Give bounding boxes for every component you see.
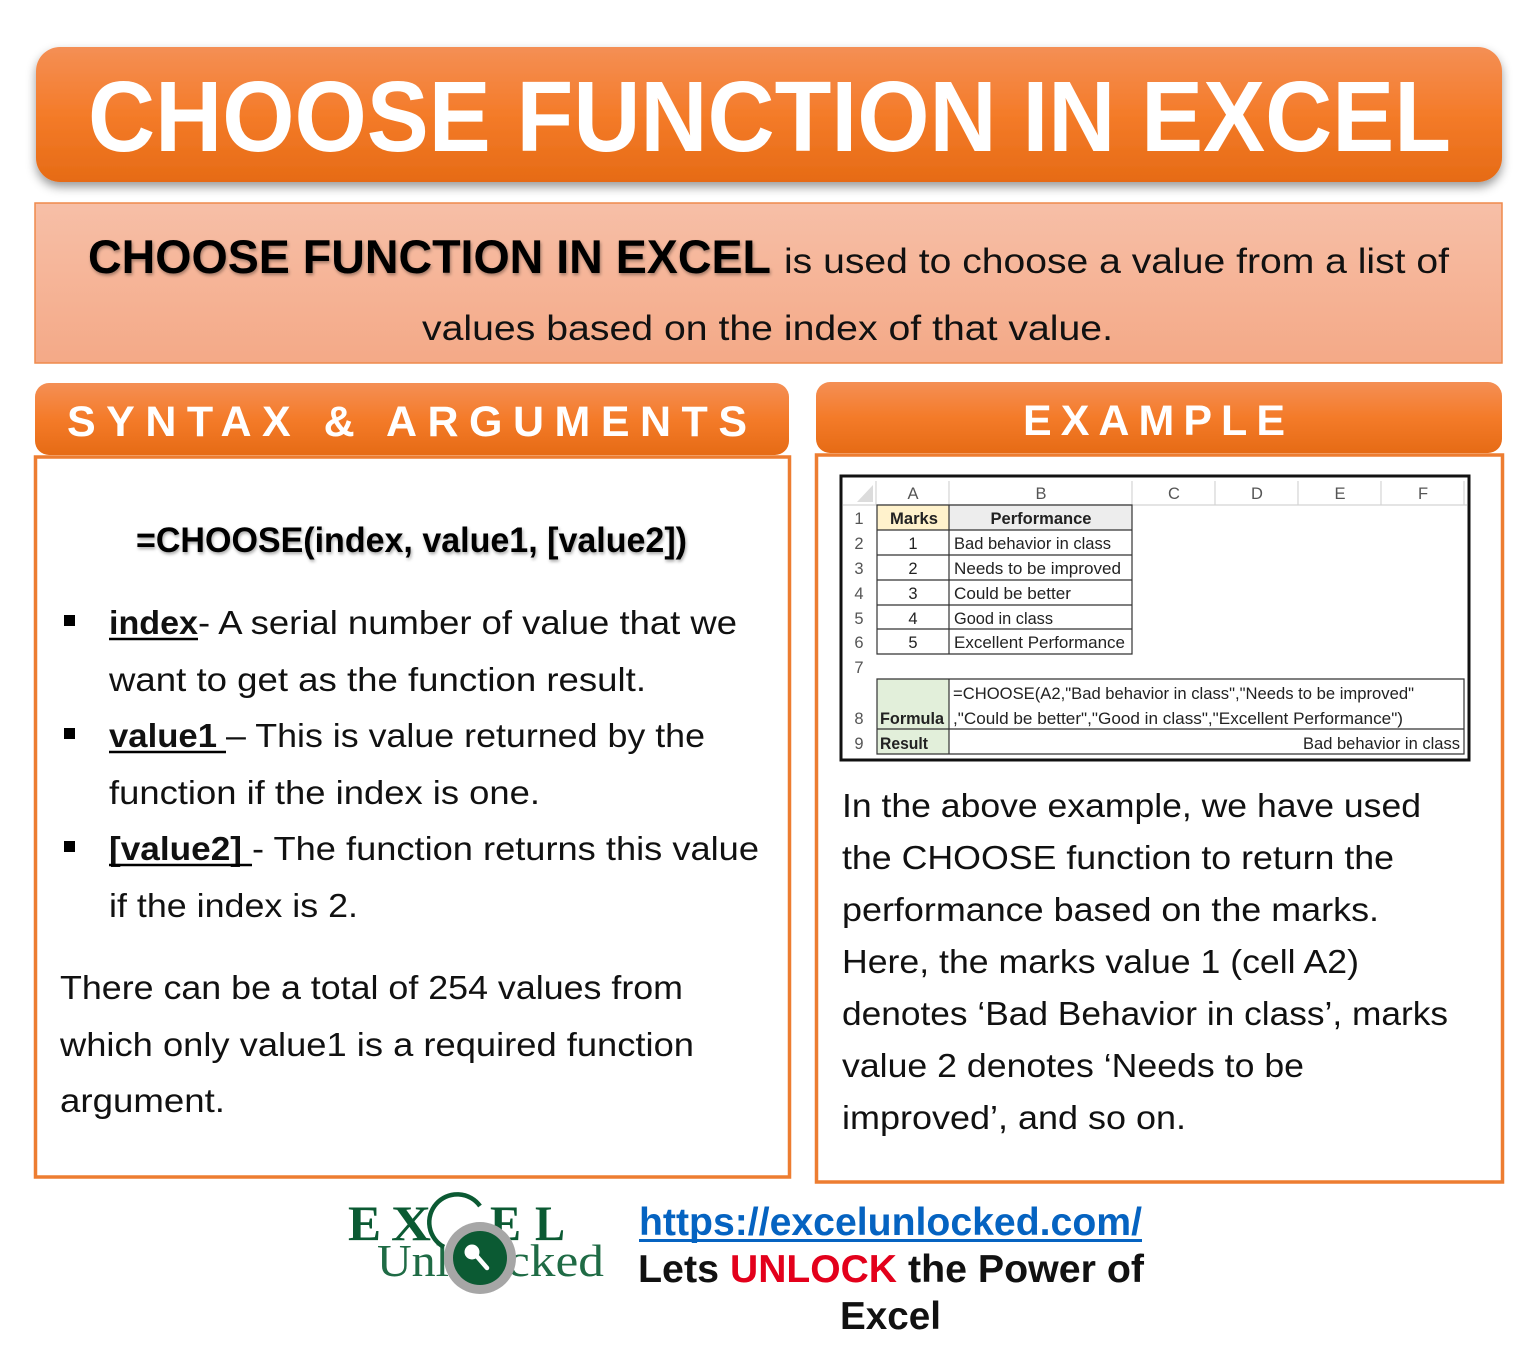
example explanation — [842, 787, 1448, 1136]
note on values: There can be a total of 254 values from — [60, 969, 683, 1006]
example explanation: value 2 denotes ‘Needs to be — [842, 1047, 1304, 1084]
tagline line 1: the Power of — [908, 1248, 1145, 1291]
title banner — [36, 47, 1502, 182]
row numbers: 7 — [854, 659, 864, 677]
marks and performance table: Marks — [890, 510, 938, 528]
tagline line 1: Lets — [638, 1248, 719, 1291]
lock shackle — [429, 1194, 480, 1247]
formula and result rows: Result — [880, 735, 928, 753]
note on values — [59, 969, 694, 1119]
marks and performance table: 5 — [908, 634, 918, 652]
marks and performance table: 4 — [908, 610, 918, 628]
example explanation: performance based on the marks. — [842, 891, 1379, 928]
definition heading: CHOOSE FUNCTION IN EXCEL — [88, 230, 771, 283]
spreadsheet example — [841, 476, 1469, 760]
marks and performance table: Needs to be improved — [954, 560, 1121, 578]
argument: value1: value1 — [109, 717, 217, 754]
marks and performance table: 3 — [908, 585, 918, 603]
argument: value2 — [64, 830, 759, 924]
logo: Excel Unlocked — [348, 1194, 604, 1294]
logo word Excel — [348, 1195, 565, 1251]
formula syntax: =CHOOSE(index, value1, [value2]) — [136, 521, 687, 560]
note on values: which only value1 is a required function — [59, 1026, 694, 1063]
row numbers — [854, 510, 864, 753]
logo word Unlocked: Unl — [377, 1236, 449, 1286]
formula and result rows — [877, 679, 1464, 754]
logo word Unlocked: cked — [507, 1236, 604, 1286]
example explanation: the CHOOSE function to return the — [842, 839, 1394, 876]
syntax heading text: SYNTAX & ARGUMENTS — [67, 398, 747, 446]
marks and performance table: Performance — [990, 510, 1092, 528]
column headers: F — [1418, 485, 1428, 503]
example header — [816, 382, 1502, 453]
formula and result rows: Bad behavior in class — [1303, 735, 1460, 753]
argument: value2: - The function returns this value — [252, 830, 759, 867]
marks and performance table: Excellent Performance — [954, 634, 1125, 652]
formula and result rows: ,"Could be better","Good in class","Excellent Performance") — [953, 710, 1403, 728]
logo word Excel: X — [391, 1195, 431, 1251]
example body box — [816, 455, 1502, 1182]
argument: value1: function if the index is one. — [109, 774, 540, 811]
example heading text: EXAMPLE — [1023, 397, 1285, 445]
argument: value1: – This is value returned by the — [226, 717, 705, 754]
row numbers: 1 — [854, 510, 864, 528]
row numbers: 9 — [854, 735, 864, 753]
marks and performance table: Could be better — [954, 585, 1072, 603]
argument: value2: if the index is 2. — [109, 887, 358, 924]
title text: CHOOSE FUNCTION IN EXCEL — [88, 61, 1451, 173]
argument: index — [64, 604, 737, 698]
marks and performance table: Good in class — [954, 610, 1053, 628]
lock body with keyhole — [444, 1222, 516, 1294]
example explanation: Here, the marks value 1 (cell A2) — [842, 943, 1359, 980]
argument: value1 — [64, 717, 705, 811]
column headers: E — [1334, 485, 1346, 503]
argument: value2: [value2] — [109, 830, 242, 867]
definition text line 2: values based on the index of that value. — [422, 309, 1113, 348]
marks and performance table: 1 — [908, 535, 918, 553]
row numbers: 3 — [854, 560, 864, 578]
definition panel — [35, 203, 1502, 363]
marks and performance table: 2 — [908, 560, 918, 578]
note on values: argument. — [60, 1082, 225, 1119]
row numbers: 8 — [854, 710, 864, 728]
column headers: B — [1035, 485, 1047, 503]
logo word Excel: E — [348, 1195, 381, 1251]
panel: example — [816, 382, 1502, 1182]
tagline line 1 — [638, 1248, 1145, 1291]
column headers — [843, 481, 1467, 505]
definition text line 1: is used to choose a value from a list of — [784, 242, 1449, 281]
logo word Excel: L — [535, 1195, 565, 1251]
column headers: D — [1251, 485, 1263, 503]
logo word Unlocked — [377, 1236, 604, 1286]
column headers: C — [1168, 485, 1180, 503]
tagline line 1: UNLOCK — [730, 1248, 897, 1291]
argument: index: index — [109, 604, 199, 641]
column headers: A — [907, 485, 919, 503]
marks and performance table — [877, 505, 1132, 654]
marks and performance table: Bad behavior in class — [954, 535, 1111, 553]
argument: index: - A serial number of value that we — [198, 604, 737, 641]
panel: syntax and arguments — [35, 383, 790, 1177]
row numbers: 5 — [854, 610, 864, 628]
syntax body box — [36, 457, 790, 1177]
website link: https://excelunlocked.com/ — [639, 1201, 1142, 1244]
row numbers: 6 — [854, 634, 864, 652]
example explanation: In the above example, we have used — [842, 787, 1421, 824]
syntax header — [35, 383, 789, 455]
logo word Excel: E — [490, 1195, 521, 1251]
tagline line 2: Excel — [840, 1295, 941, 1338]
footer tagline — [638, 1201, 1145, 1338]
formula and result rows: =CHOOSE(A2,"Bad behavior in class","Needs to be improved" — [953, 685, 1414, 703]
example explanation: improved’, and so on. — [842, 1099, 1186, 1136]
formula and result rows: Formula — [880, 710, 945, 728]
row numbers: 4 — [854, 585, 864, 603]
row numbers: 2 — [854, 535, 864, 553]
example explanation: denotes ‘Bad Behavior in class’, marks — [842, 995, 1448, 1032]
argument: index: want to get as the function result. — [108, 661, 646, 698]
